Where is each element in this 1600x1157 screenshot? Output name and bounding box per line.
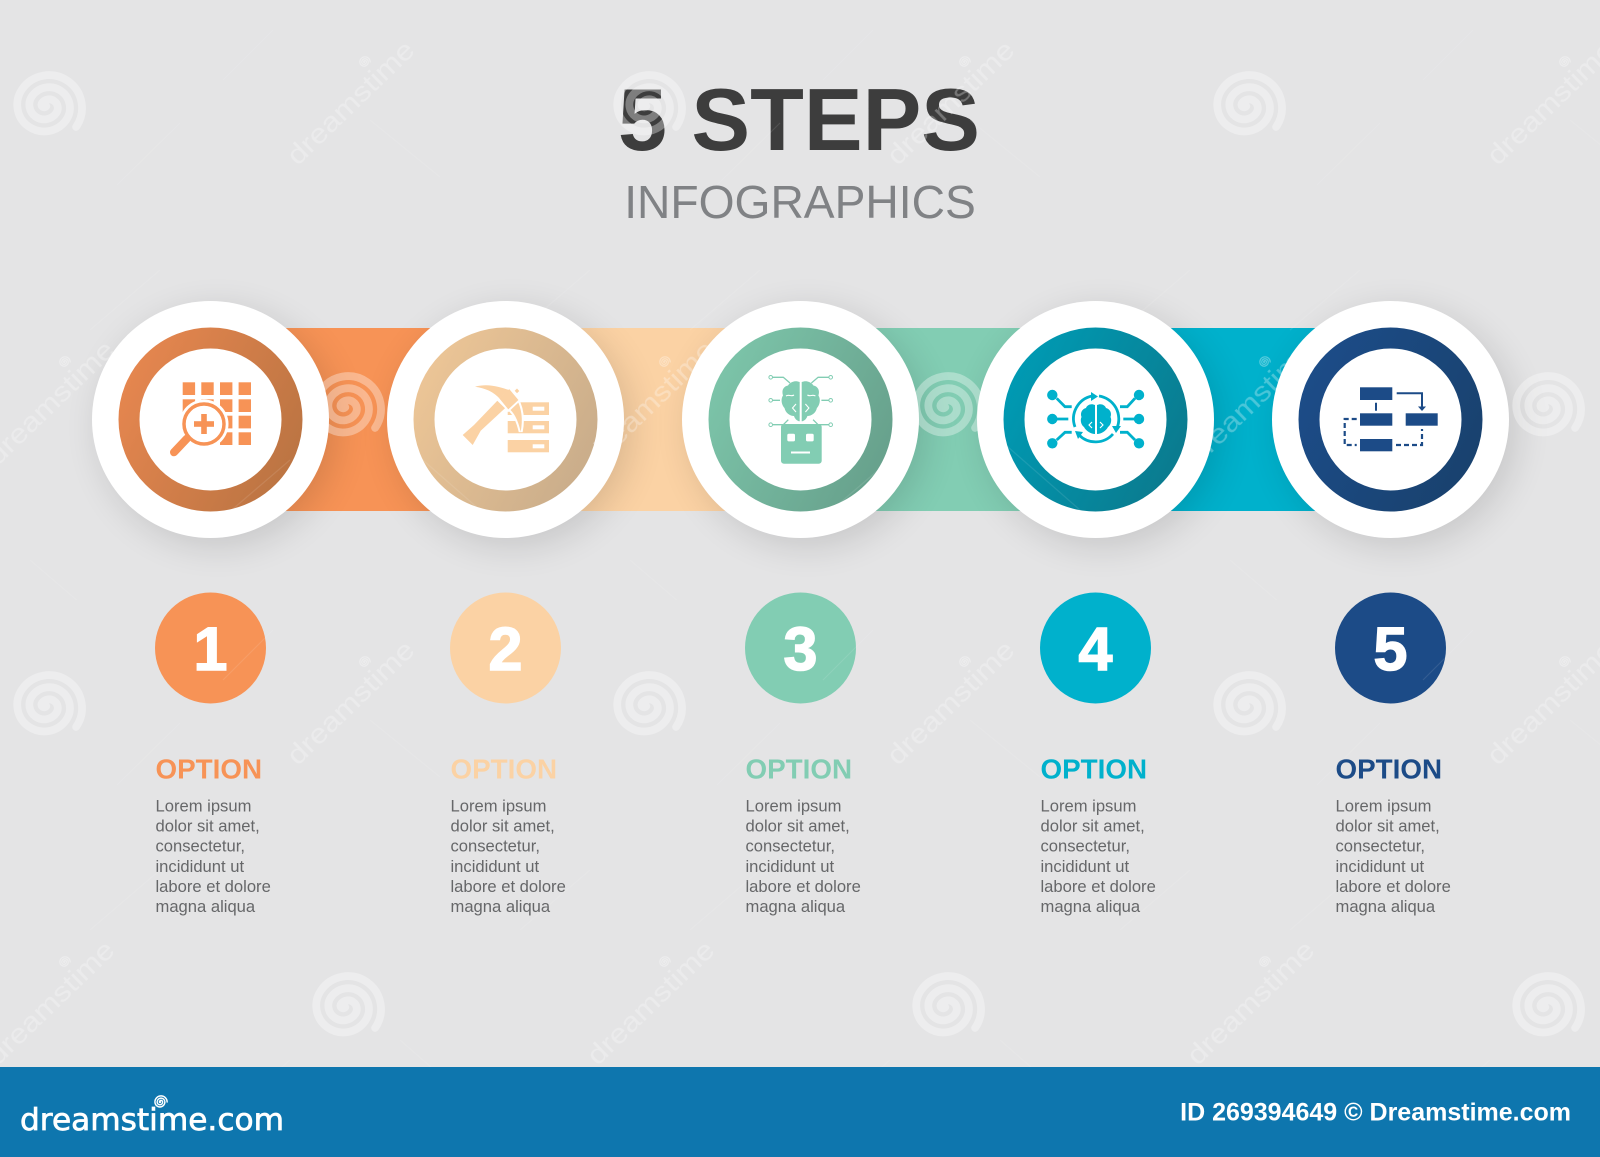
step 1 medallion [92,301,336,546]
footer bar [0,1067,1600,1157]
step 3 text block: incididunt ut [746,857,834,876]
step 4 text block: Lorem ipsum [1040,796,1136,816]
step 1 text block: labore et dolore [156,877,271,896]
step 1 number badge [155,592,266,704]
step 5 medallion [1272,301,1516,546]
step 2 number badge: 2 [489,615,522,683]
step 2 text block: incididunt ut [450,857,539,876]
watermark overlay: dreamstime [580,334,720,471]
step 3 text block: consectetur, [746,837,835,856]
step 2 text block: magna aliqua [450,897,551,916]
watermark overlay: dreamstime [280,634,420,771]
step 2 text block: consectetur, [450,837,540,856]
step 1 number badge: 1 [194,615,227,683]
step 4 text block: OPTION [1040,754,1147,784]
step 3 text block: dolor sit amet, [746,817,850,836]
step 4 text block: consectetur, [1040,837,1130,856]
step 3 text block: Lorem ipsum [746,796,841,816]
step 3 medallion [682,301,926,546]
watermark overlay: dreamstime [1180,934,1320,1071]
step 5 number badge [1335,592,1446,704]
icon: grid with magnifier [174,382,251,452]
watermark overlay: dreamstime [880,34,1020,171]
step 1 text block: magna aliqua [156,897,256,916]
step 4 text block: magna aliqua [1040,897,1141,916]
step 2 medallion [387,301,631,546]
step 2 number badge [450,592,561,704]
step 3 text block: labore et dolore [746,877,861,896]
step 4 medallion [977,301,1221,546]
footer credit: ID 269394649 © Dreamstime.com [1180,1098,1571,1126]
step 2 text block: labore et dolore [450,877,566,896]
watermark overlay: dreamstime [580,934,720,1071]
step 2 text block: OPTION [450,754,557,784]
icon: brain network cycle [1047,390,1144,448]
step 3 text block [746,754,861,916]
step 4 number badge [1040,592,1151,704]
step 1 text block: dolor sit amet, [156,817,260,836]
step 3 text block: OPTION [746,754,852,784]
step 5 text block: consectetur, [1336,837,1425,856]
footer logo: dreamstime.com [20,1103,284,1138]
watermark overlay: dreamstime [1180,334,1320,471]
step 3 number badge: 3 [784,615,817,683]
step 5 text block: incididunt ut [1336,857,1424,876]
watermark overlay: dreamstime [880,634,1020,771]
step 1 text block: Lorem ipsum [156,796,251,816]
step 5 text block: magna aliqua [1336,897,1436,916]
step 4 text block [1040,754,1156,916]
icon: robot head with brain [769,376,832,464]
icon: flowchart [1345,387,1438,451]
step 1 text block: incididunt ut [156,857,244,876]
connecting band [210,328,1390,511]
step 5 text block: Lorem ipsum [1336,796,1431,816]
icon: pickaxe and server [463,385,549,452]
step 3 text block: magna aliqua [746,897,846,916]
step 1 text block: consectetur, [156,837,245,856]
step 5 number badge: 5 [1374,615,1407,683]
step 3 number badge [745,592,856,704]
step 2 text block: dolor sit amet, [450,817,555,836]
step 4 text block: incididunt ut [1040,857,1129,876]
step 2 text block [450,754,566,916]
step 1 text block [156,754,271,916]
step 2 text block: Lorem ipsum [450,796,546,816]
step 5 text block: labore et dolore [1336,877,1451,896]
step 1 text block: OPTION [156,754,262,784]
watermark overlay: dreamstime [280,34,420,171]
step 4 number badge: 4 [1079,615,1113,683]
step 4 text block: labore et dolore [1040,877,1156,896]
step 5 text block: OPTION [1336,754,1442,784]
step 4 text block: dolor sit amet, [1040,817,1145,836]
title: 5 STEPS [618,70,980,169]
step 5 text block: dolor sit amet, [1336,817,1440,836]
step 5 text block [1336,754,1451,916]
subtitle: INFOGRAPHICS [624,176,976,228]
